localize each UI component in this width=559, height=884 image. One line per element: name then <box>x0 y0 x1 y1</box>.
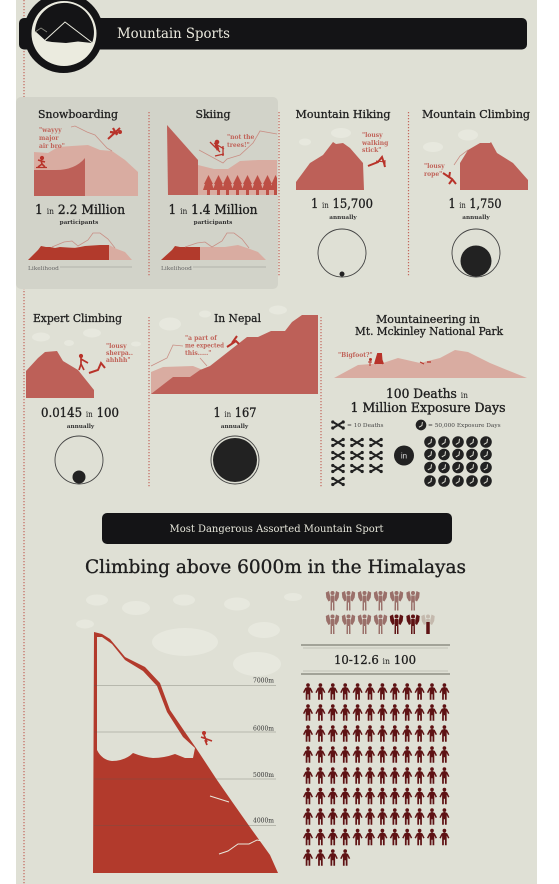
heading: Mountain Climbing <box>422 107 531 121</box>
title: Himalayas: Climbing above 6000m in the Himalayas <box>85 557 466 578</box>
clouds <box>159 306 287 330</box>
icon: small red fallen climber <box>420 362 431 364</box>
quote: ahhhh" <box>106 357 130 364</box>
panel: snowboarding <box>28 107 138 272</box>
statistic line 2: 1 Million Exposure Days <box>350 401 506 416</box>
icon: falling climber <box>201 732 212 745</box>
icon grid: 100 climbers <box>303 683 449 866</box>
statistic band: 10-12.6 in 100: 10-12.6 in 100 <box>334 653 416 667</box>
statistic: 1 in 2.2 Million <box>35 203 126 218</box>
chart: mountain <box>460 142 528 190</box>
chart: probability circle <box>211 436 259 484</box>
icon: snowboarder on ground <box>36 156 47 168</box>
quote: "Bigfoot?" <box>338 352 373 359</box>
icon grid: angels <box>326 591 435 634</box>
header bar: Mountain Sports <box>19 0 527 73</box>
chart: probability circle <box>452 229 500 277</box>
quote: "wayyy <box>39 127 62 134</box>
caption: participants <box>194 220 232 226</box>
panel: mountain hiking <box>296 107 391 277</box>
icon grid: clocks <box>424 436 492 487</box>
clouds: sky <box>76 593 302 676</box>
icon: sherpa kicking climber <box>79 354 105 373</box>
icon: skier crashing <box>210 140 224 156</box>
legend: bone: = 10 Deaths <box>347 423 384 429</box>
statistic: 100 Deaths in <box>386 387 468 402</box>
chart: likelihood <box>161 233 266 260</box>
chart: mountain slope <box>151 315 318 394</box>
icon grid: bones <box>331 438 383 486</box>
quote: major <box>39 135 59 142</box>
quote: sherpa.. <box>106 350 133 357</box>
legend: clock <box>416 420 501 430</box>
altitude labels: 4000m <box>253 818 274 824</box>
icon: mountain badge <box>24 0 104 73</box>
heading: Mt. Mckinley National Park <box>355 324 504 338</box>
chart: halfpipe mountain <box>34 126 138 196</box>
badge: in <box>394 446 414 466</box>
icon: snowboarder in air <box>108 128 122 139</box>
chart: mountain <box>26 351 94 398</box>
chart: ski slope <box>167 125 277 195</box>
chart: probability circle <box>318 229 366 277</box>
quote: me expected <box>185 342 225 350</box>
icon: falling climber <box>443 172 456 184</box>
icon: bigfoot and climber <box>368 354 383 366</box>
quote: air bro" <box>39 143 65 150</box>
legend: clock: = 50,000 Exposure Days <box>428 423 501 429</box>
quote: "lousy <box>362 132 383 139</box>
statistic: 0.0145 in 100 <box>41 406 119 421</box>
quote: "lousy <box>424 163 445 170</box>
clouds <box>299 128 351 146</box>
panel: expert climbing <box>26 311 141 484</box>
quote: "not the <box>227 134 254 141</box>
icon: falling hiker <box>368 157 385 167</box>
altitude gridlines <box>94 686 276 826</box>
heading: Skiing <box>196 107 231 121</box>
quote: trees!" <box>227 142 250 149</box>
rope <box>454 150 468 165</box>
caption: annually <box>221 424 249 430</box>
panel: Mt. McKinley <box>331 312 527 487</box>
statistic: 1 in 1.4 Million <box>168 203 258 218</box>
chart: mountain <box>296 142 364 190</box>
likelihood label: Likelihood <box>28 266 59 272</box>
header title: Mountain Sports <box>117 26 230 42</box>
altitude labels <box>253 678 274 824</box>
caption: participants <box>60 220 98 226</box>
statistic: 1 in 167 <box>214 406 256 421</box>
legend: bone <box>331 420 384 430</box>
heading: Mountaineering in <box>376 312 481 326</box>
quote: rope" <box>424 171 442 178</box>
altitude labels: 5000m <box>253 772 274 779</box>
heading: Expert Climbing <box>33 311 123 325</box>
panel: shaded backdrop <box>16 97 278 289</box>
caption: annually <box>329 215 357 221</box>
panel: skiing <box>161 107 277 272</box>
mountain cracks <box>210 796 262 854</box>
chart: likelihood <box>28 233 132 260</box>
heading: In Nepal <box>214 311 261 325</box>
section bar: most dangerous <box>102 513 452 544</box>
statistic: 1 in 15,700 <box>311 197 373 212</box>
chart: mountain range <box>334 350 527 378</box>
quote: "lousy <box>106 343 127 350</box>
caption: annually <box>462 215 490 221</box>
badge: in: in <box>401 452 407 460</box>
heading: Mountain Hiking <box>296 107 391 121</box>
section bar: most dangerous: Most Dangerous Assorted Mountain Sport <box>170 523 384 535</box>
altitude labels: 7000m <box>253 678 274 684</box>
altitude labels: 6000m <box>253 726 274 732</box>
clouds <box>32 328 141 346</box>
chart: probability circle <box>55 436 103 484</box>
statistic: 1 in 1,750 <box>448 197 502 212</box>
quote: this....." <box>185 350 211 357</box>
panel: in Nepal <box>151 306 318 484</box>
panel: mountain climbing <box>422 107 531 277</box>
quote: stick" <box>362 147 381 154</box>
icon: climber <box>227 336 239 347</box>
likelihood label: Likelihood <box>161 266 192 272</box>
quote: walking <box>361 140 389 147</box>
clouds <box>423 130 478 152</box>
chart: altitude mountain <box>93 632 278 873</box>
heading: Snowboarding <box>38 107 119 121</box>
quote: "a part of <box>185 335 217 342</box>
caption: annually <box>67 424 95 430</box>
icon: tree row <box>203 175 277 195</box>
